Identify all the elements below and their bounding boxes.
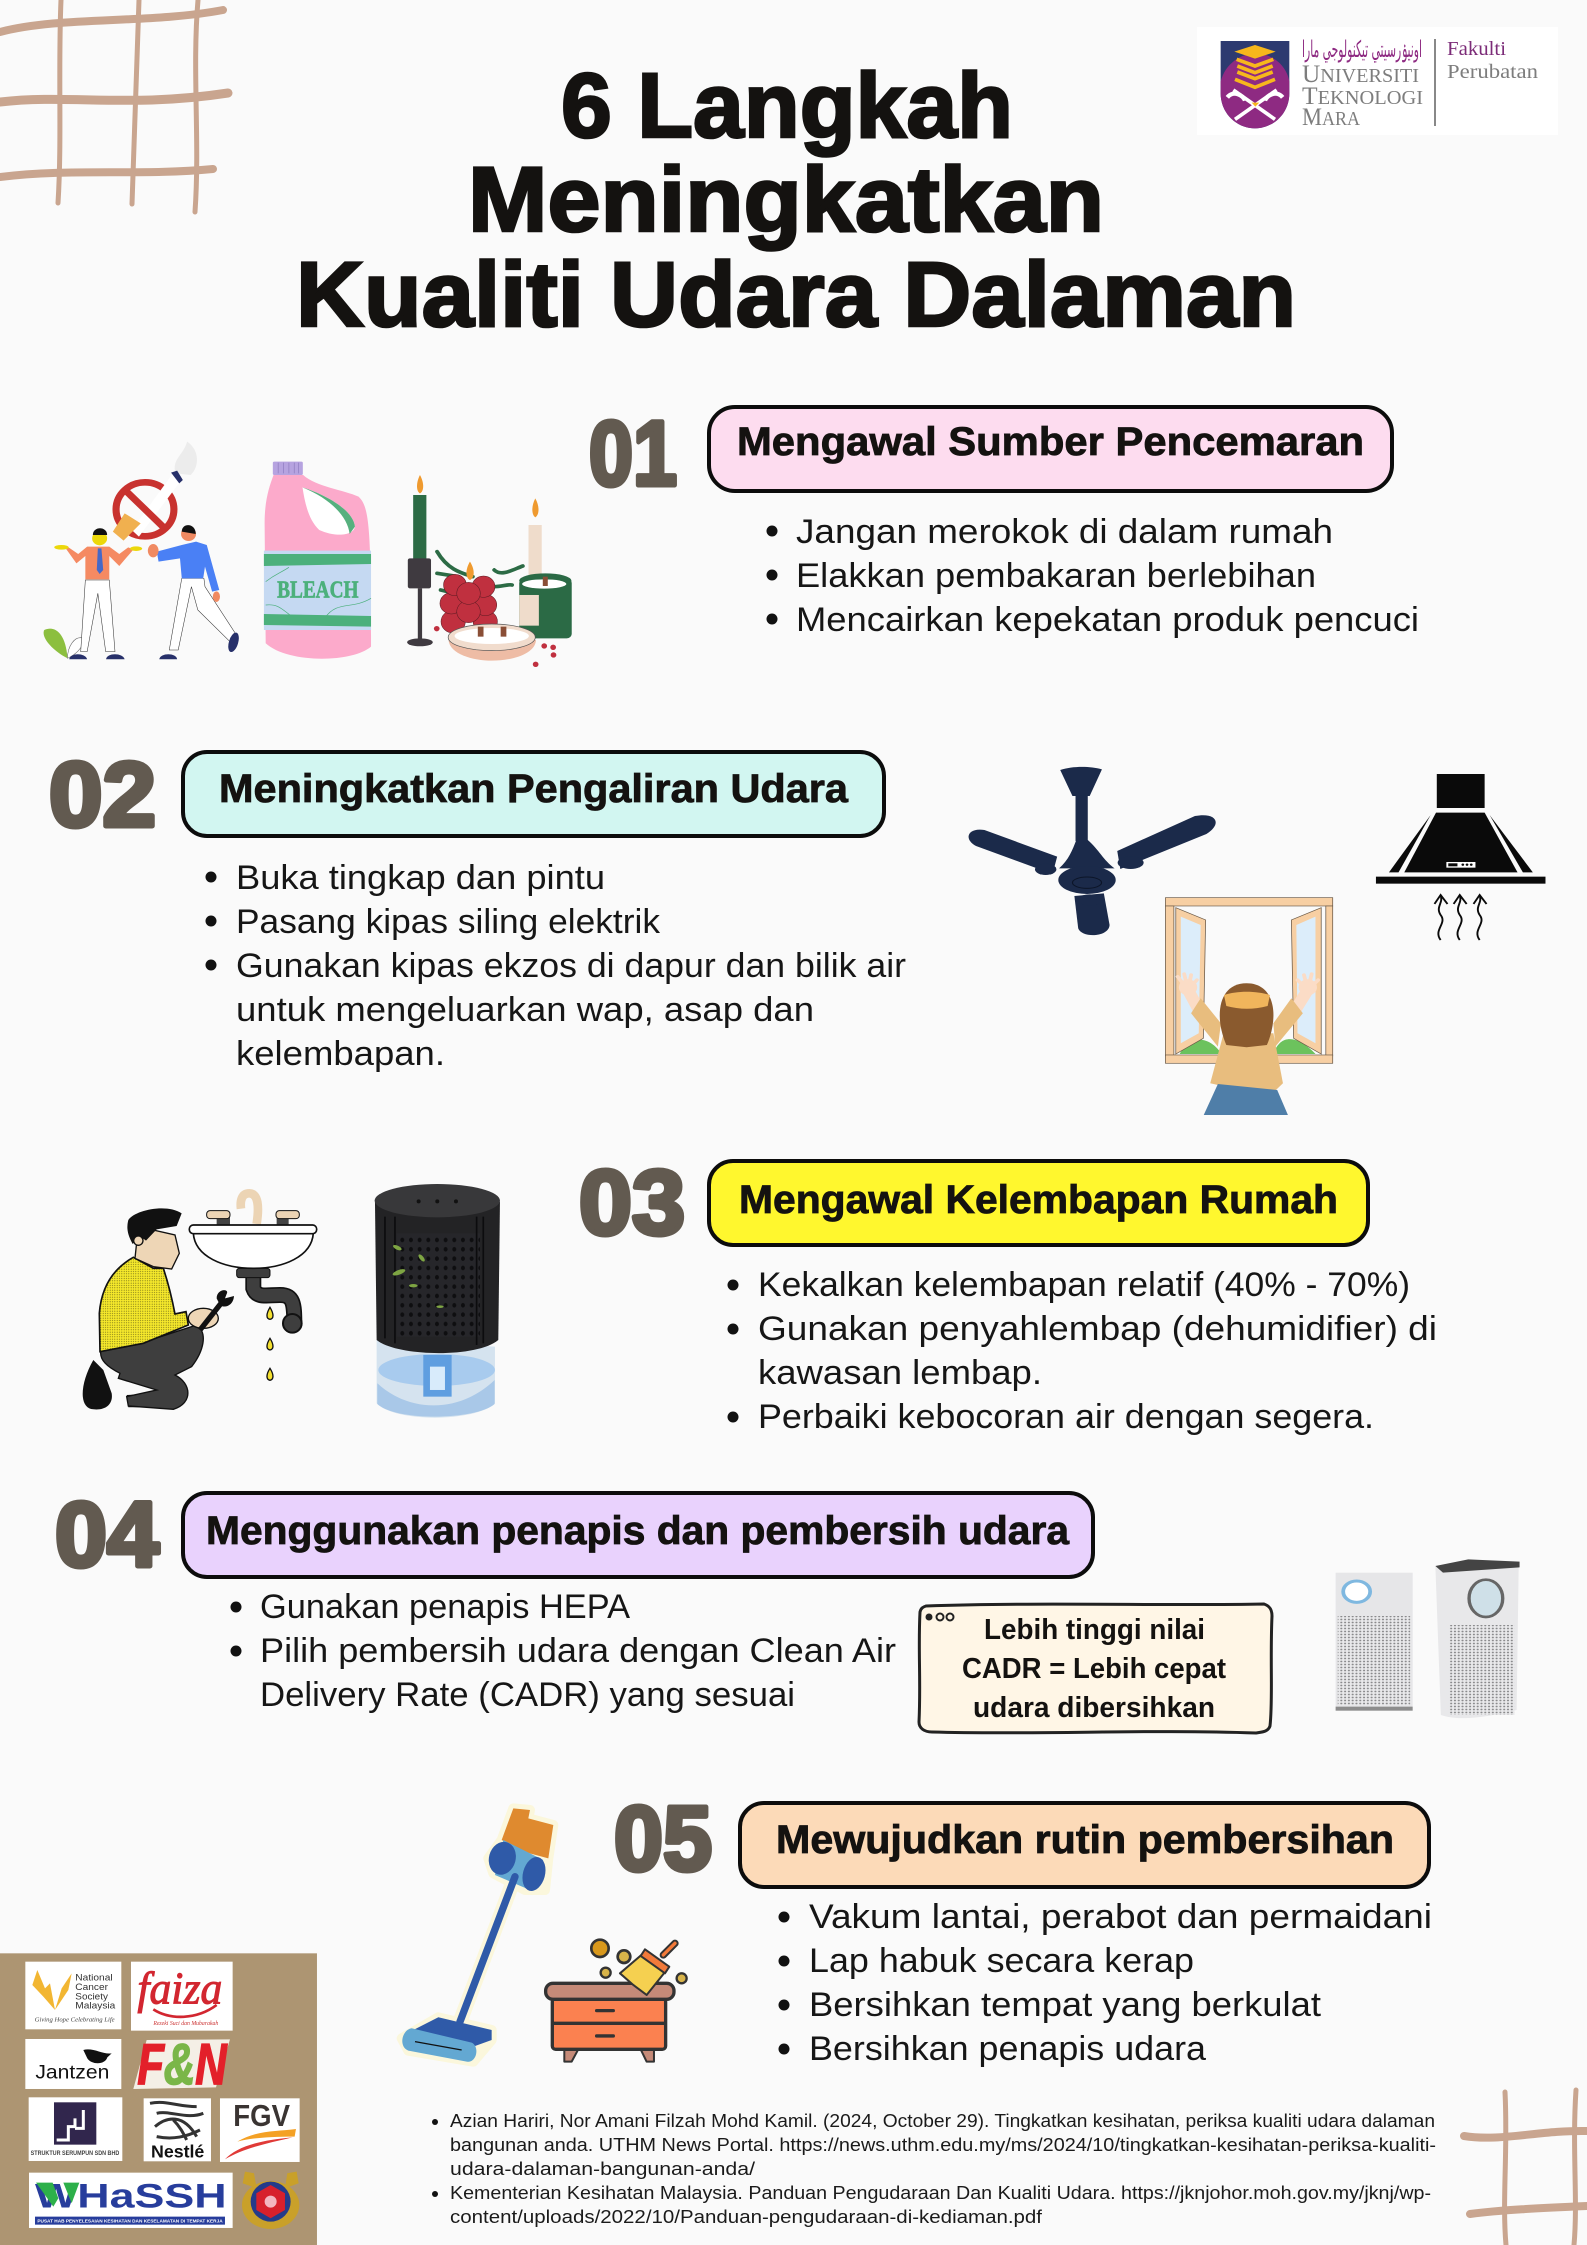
bullets 04 bbox=[230, 1588, 896, 1714]
number 04: 04 bbox=[55, 1484, 159, 1586]
bullets 04: Delivery Rate (CADR) yang sesuai bbox=[260, 1676, 795, 1714]
logo: Struktur Serumpun bbox=[29, 2097, 122, 2161]
bullets 05 bbox=[778, 1898, 1432, 2068]
logo: F&N: F&N bbox=[137, 2033, 228, 2097]
references: bangunan anda. UTHM News Portal. https://news.uthm.edu.my/ms/2024/10/tingkatkan-kesihatan-periksa-kualiti- bbox=[450, 2135, 1436, 2155]
logo: National Cancer Society Malaysia: Malaysia bbox=[75, 2001, 115, 2011]
references: udara-dalaman-bangunan-anda/ bbox=[450, 2159, 755, 2179]
logo: National Cancer Society Malaysia: Cancer bbox=[75, 1982, 108, 1992]
logo: Nestle bbox=[144, 2098, 211, 2162]
logo: National Cancer Society Malaysia bbox=[25, 1962, 121, 2029]
heading 05 bbox=[740, 1803, 1429, 1887]
logo: UiTM Fakulti Perubatan bbox=[1197, 27, 1558, 135]
bullets 02: kelembapan. bbox=[236, 1035, 445, 1073]
logo: Nestle: Nestlé bbox=[151, 2142, 205, 2162]
logo: Faiza: faiza bbox=[137, 1963, 222, 2013]
logo: UiTM Fakulti Perubatan: MARA bbox=[1302, 104, 1360, 131]
bullets 04: Gunakan penapis HEPA bbox=[260, 1588, 630, 1626]
step 05 illustrations bbox=[402, 1808, 687, 2062]
icon: rising air arrows bbox=[1434, 895, 1487, 940]
logo: UiTM Fakulti Perubatan: Fakulti bbox=[1447, 38, 1506, 60]
bullets 01: Jangan merokok di dalam rumah bbox=[796, 513, 1333, 551]
bullets 03: Gunakan penyahlembap (dehumidifier) di bbox=[758, 1310, 1437, 1348]
icon: air purifiers bbox=[1336, 1559, 1520, 1718]
heading 04 bbox=[183, 1493, 1093, 1577]
decorative grid: top left bbox=[0, 0, 228, 212]
title: 6 Langkah bbox=[561, 55, 1013, 157]
logo: WHaSSH: WHaSSH bbox=[35, 2177, 227, 2215]
bullets 05: Bersihkan penapis udara bbox=[809, 2030, 1206, 2068]
step 04 bbox=[55, 1484, 1093, 1714]
number 02: 02 bbox=[49, 744, 156, 846]
bullets 03: Perbaiki kebocoran air dengan segera. bbox=[758, 1398, 1374, 1436]
logo: UiTM Fakulti Perubatan: TEKNOLOGI bbox=[1302, 83, 1423, 110]
icon: bleach bottle: BLEACH bbox=[277, 577, 359, 603]
bullets 02: Pasang kipas siling elektrik bbox=[236, 903, 661, 941]
icon: girl opening window bbox=[1165, 898, 1333, 1115]
bullets 03 bbox=[728, 1266, 1437, 1436]
heading 02 bbox=[183, 752, 884, 836]
logo: Jantzen bbox=[25, 2039, 121, 2089]
heading 01: Mengawal Sumber Pencemaran bbox=[737, 420, 1364, 464]
bullets 04: Pilih pembersih udara dengan Clean Air bbox=[260, 1632, 896, 1670]
bullets 02: Buka tingkap dan pintu bbox=[236, 859, 605, 897]
logo: National Cancer Society Malaysia: National bbox=[75, 1973, 113, 1983]
bullets 02 bbox=[206, 859, 906, 1073]
title bbox=[296, 55, 1296, 346]
logo: FGV: FGV bbox=[233, 2099, 290, 2133]
icon: candles bbox=[407, 475, 572, 667]
bullets 01: Elakkan pembakaran berlebihan bbox=[796, 557, 1316, 595]
icon: UiTM shield bbox=[1221, 41, 1289, 128]
step 05 bbox=[614, 1788, 1432, 2068]
title: Kualiti Udara Dalaman bbox=[296, 244, 1296, 346]
number 01: 01 bbox=[589, 403, 677, 505]
bullets 05: Lap habuk secara kerap bbox=[809, 1942, 1194, 1980]
logo: UiTM Fakulti Perubatan: UNIVERSITI bbox=[1302, 61, 1419, 88]
title: Meningkatkan bbox=[468, 149, 1104, 251]
bullets 02: Gunakan kipas ekzos di dapur dan bilik air bbox=[236, 947, 906, 985]
icon: dehumidifier bbox=[375, 1184, 500, 1418]
icon: vacuum cleaner bbox=[402, 1808, 553, 2062]
logo: Struktur Serumpun: STRUKTUR SERUMPUN SDN BHD bbox=[31, 2150, 120, 2157]
step 02 bbox=[49, 744, 906, 1073]
logo: FGV bbox=[220, 2098, 300, 2162]
logo: WHaSSH: PUSAT HAB PENYELESAIAN KESIHATAN DAN KESELAMATAN DI TEMPAT KERJA bbox=[37, 2218, 223, 2223]
icon: dusting cabinet bbox=[546, 1940, 687, 2062]
heading 01 bbox=[709, 407, 1392, 491]
logo: Faiza: Rezeki Suci dan Mubarakah bbox=[152, 2020, 218, 2027]
heading 03 bbox=[709, 1161, 1368, 1245]
icon: ceiling fan bbox=[969, 767, 1216, 935]
bullets 05: Vakum lantai, perabot dan permaidani bbox=[809, 1898, 1432, 1936]
step 01 bbox=[589, 403, 1419, 639]
logo: crest bbox=[242, 2172, 299, 2229]
bullets 01: Mencairkan kepekatan produk pencuci bbox=[796, 601, 1419, 639]
logo: UiTM Fakulti Perubatan: Perubatan bbox=[1447, 61, 1538, 83]
references: content/uploads/2022/10/Panduan-pengudaraan-di-kediaman.pdf bbox=[450, 2207, 1043, 2227]
panel: sponsor logos bbox=[0, 1953, 317, 2245]
logo: Jantzen: Jantzen bbox=[35, 2063, 109, 2084]
step 01 illustrations bbox=[44, 442, 572, 667]
step 03 illustrations bbox=[83, 1184, 500, 1418]
logo: National Cancer Society Malaysia: Giving Hope Celebrating Life bbox=[35, 2017, 115, 2024]
step 02 illustrations bbox=[969, 767, 1545, 1115]
references: Kementerian Kesihatan Malaysia. Panduan Pengudaraan Dan Kualiti Udara. https://jknjohor.moh.gov.my/jknj/wp- bbox=[450, 2183, 1431, 2203]
step 03 bbox=[579, 1152, 1437, 1436]
bullets 03: Kekalkan kelembapan relatif (40% - 70%) bbox=[758, 1266, 1410, 1304]
bullets 03: kawasan lembap. bbox=[758, 1354, 1042, 1392]
decorative grid: bottom right bbox=[1464, 2090, 1587, 2245]
logo: National Cancer Society Malaysia: Society bbox=[75, 1991, 109, 2001]
heading 03: Mengawal Kelembapan Rumah bbox=[739, 1178, 1338, 1222]
icon: man fixing leaking sink bbox=[83, 1193, 317, 1409]
icon: bleach bottle bbox=[264, 462, 371, 659]
icon: no smoking people bbox=[44, 442, 241, 659]
heading 05: Mewujudkan rutin pembersihan bbox=[776, 1818, 1394, 1862]
callout: CADR note bbox=[919, 1604, 1272, 1733]
callout: CADR note: CADR = Lebih cepat bbox=[962, 1653, 1226, 1685]
logo: Faiza bbox=[131, 1962, 233, 2031]
bullets 02: untuk mengeluarkan wap, asap dan bbox=[236, 991, 814, 1029]
number 03: 03 bbox=[579, 1152, 685, 1254]
number 05: 05 bbox=[614, 1788, 712, 1890]
bullets 01 bbox=[766, 513, 1419, 639]
callout: CADR note: udara dibersihkan bbox=[973, 1692, 1215, 1724]
references: Azian Hariri, Nor Amani Filzah Mohd Kamil. (2024, October 29). Tingkatkan kesihatan, periksa kualiti udara dalaman bbox=[450, 2111, 1435, 2131]
heading 04: Menggunakan penapis dan pembersih udara bbox=[206, 1509, 1070, 1553]
bullets 05: Bersihkan tempat yang berkulat bbox=[809, 1986, 1322, 2024]
icon: cooker hood bbox=[1376, 774, 1545, 884]
logo: UiTM Fakulti Perubatan: اونيۏرسيتي تيكنولوجي مارا bbox=[1302, 37, 1422, 63]
heading 02: Meningkatkan Pengaliran Udara bbox=[219, 767, 849, 811]
references bbox=[432, 2111, 1436, 2227]
logo: WHaSSH bbox=[29, 2173, 233, 2228]
callout: CADR note: Lebih tinggi nilai bbox=[984, 1614, 1205, 1646]
